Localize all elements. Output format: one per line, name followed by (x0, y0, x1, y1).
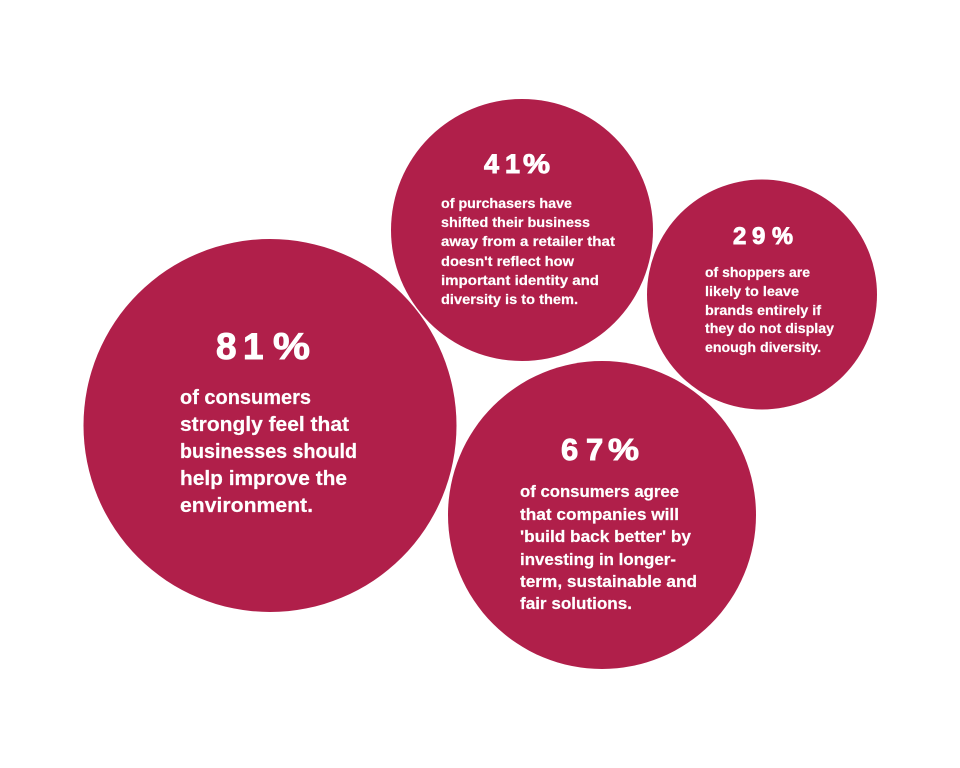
text block: 81% description: environment. (180, 495, 313, 517)
heading: 29%: % (772, 223, 793, 250)
text block: 41% description: of purchasers have (441, 195, 572, 211)
text block: 67% description: that companies will (520, 506, 679, 524)
text block: 41% description (441, 195, 615, 307)
heading: 29%: 29 (733, 223, 765, 250)
text block: 41% description: doesn't reflect how (441, 253, 574, 269)
text block: 29% description: likely to leave (705, 283, 799, 299)
text block: 81% description: of consumers (180, 387, 311, 409)
text block: 41% description: shifted their business (441, 214, 590, 230)
heading: 67%: 67 (561, 432, 603, 467)
heading: 41%: 41 (484, 149, 520, 179)
text block: 41% description: important identity and (441, 272, 599, 288)
text block: 81% description: help improve the (180, 468, 347, 490)
heading: 81%: 81 (216, 326, 264, 367)
heading: 67%: % (608, 432, 639, 467)
text block: 29% description (705, 264, 834, 355)
panel: 41% bubble (391, 99, 653, 361)
panel: 29% bubble (647, 180, 877, 410)
heading: 41%: % (523, 149, 550, 179)
text block: 81% description (180, 387, 357, 517)
text block: 29% description: they do not display (705, 320, 834, 336)
panel: 81% bubble (84, 239, 456, 612)
heading: 41% (484, 149, 550, 179)
text block: 41% description: diversity is to them. (441, 291, 578, 307)
text block: 67% description: of consumers agree (520, 483, 679, 501)
text block: 67% description: fair solutions. (520, 595, 632, 613)
heading: 81%: % (273, 326, 310, 367)
text block: 41% description: away from a retailer that (441, 233, 615, 249)
heading: 29% (733, 223, 793, 250)
text block: 29% description: of shoppers are (705, 264, 810, 280)
heading: 81% (216, 326, 310, 367)
text block: 29% description: brands entirely if (705, 302, 821, 318)
heading: 67% (561, 432, 639, 467)
text block: 81% description: businesses should (180, 441, 357, 463)
text block: 67% description: investing in longer- (520, 551, 676, 569)
text block: 67% description: term, sustainable and (520, 573, 697, 591)
text block: 67% description: 'build back better' by (520, 528, 692, 546)
text block: 81% description: strongly feel that (180, 414, 349, 436)
text block: 67% description (520, 483, 697, 613)
text block: 29% description: enough diversity. (705, 339, 821, 355)
panel: 67% bubble (448, 361, 756, 669)
